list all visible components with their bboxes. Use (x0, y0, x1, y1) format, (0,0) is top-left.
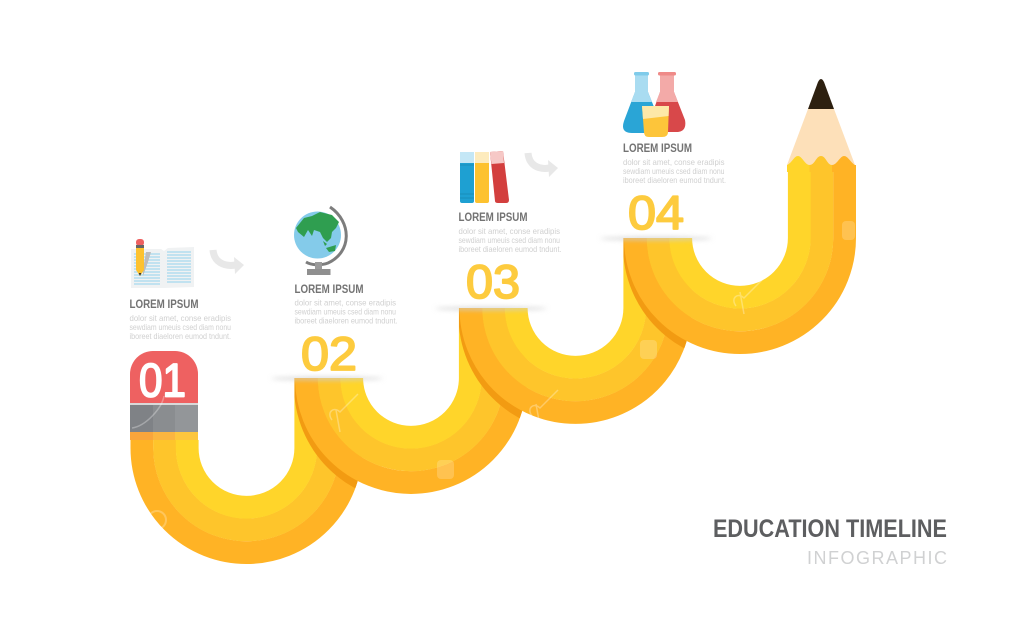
label shadow 3 (435, 307, 547, 310)
text block 2: dolor sit amet, conse eradipis (294, 298, 396, 308)
pencil segment 1 with eraser end (142, 378, 351, 553)
text block 4 (623, 143, 726, 185)
title: EDUCATION TIMELINE (713, 515, 947, 543)
pencil segment 4 with body (635, 165, 845, 343)
pencil segment 2 (306, 308, 516, 483)
subtitle: INFOGRAPHIC (807, 548, 947, 568)
number 04: 04 (628, 186, 684, 239)
eraser ferrule grey band (130, 403, 198, 440)
pencil tip (787, 79, 855, 172)
text block 4: iboreet diaeloren eumod tndunt. (623, 175, 726, 185)
shadow of segment 4 on segment 3 (624, 238, 687, 348)
text block 4: LOREM IPSUM (623, 143, 692, 155)
text block 1 (130, 299, 231, 341)
text block 2: iboreet diaeloren eumod tndunt. (294, 316, 398, 326)
text block 1: iboreet diaeloren eumod tndunt. (130, 331, 231, 341)
icon: flasks and beaker (623, 72, 685, 137)
text block 4: dolor sit amet, conse eradipis (623, 157, 724, 167)
text block 3: dolor sit amet, conse eradipis (458, 226, 560, 236)
text block 3: LOREM IPSUM (458, 212, 528, 224)
arrow 1 (213, 250, 244, 274)
text block 1: dolor sit amet, conse eradipis (130, 313, 231, 323)
icon: books (460, 151, 509, 203)
eraser red tip (130, 351, 198, 403)
text block 1: LOREM IPSUM (130, 299, 198, 311)
text block 3 (458, 212, 562, 254)
number 03: 03 (466, 255, 520, 308)
text block 2: sewdiam umeuis csed diam nonu (294, 306, 396, 316)
shadow of segment 3 on segment 2 (459, 308, 522, 418)
arrow 2 (528, 153, 558, 177)
label shadow 4 (600, 237, 712, 240)
label shadow 2 (271, 377, 383, 380)
text block 3: sewdiam umeuis csed diam nonu (458, 235, 560, 245)
icon: globe (294, 207, 346, 275)
text block 4: sewdiam umeuis csed diam nonu (623, 166, 725, 176)
text block 2 (294, 284, 398, 326)
number 01: 01 (139, 354, 186, 406)
shadow of segment 2 on segment 1 (294, 378, 358, 488)
text block 3: iboreet diaeloren eumod tndunt. (458, 244, 562, 254)
icon: book and pencil (131, 239, 194, 288)
watermarks (132, 221, 855, 529)
text block 2: LOREM IPSUM (294, 284, 364, 296)
infographic canvas (130, 72, 946, 564)
pencil segment 3 (471, 238, 680, 413)
number 02: 02 (301, 327, 357, 380)
text block 1: sewdiam umeuis csed diam nonu (130, 322, 231, 332)
